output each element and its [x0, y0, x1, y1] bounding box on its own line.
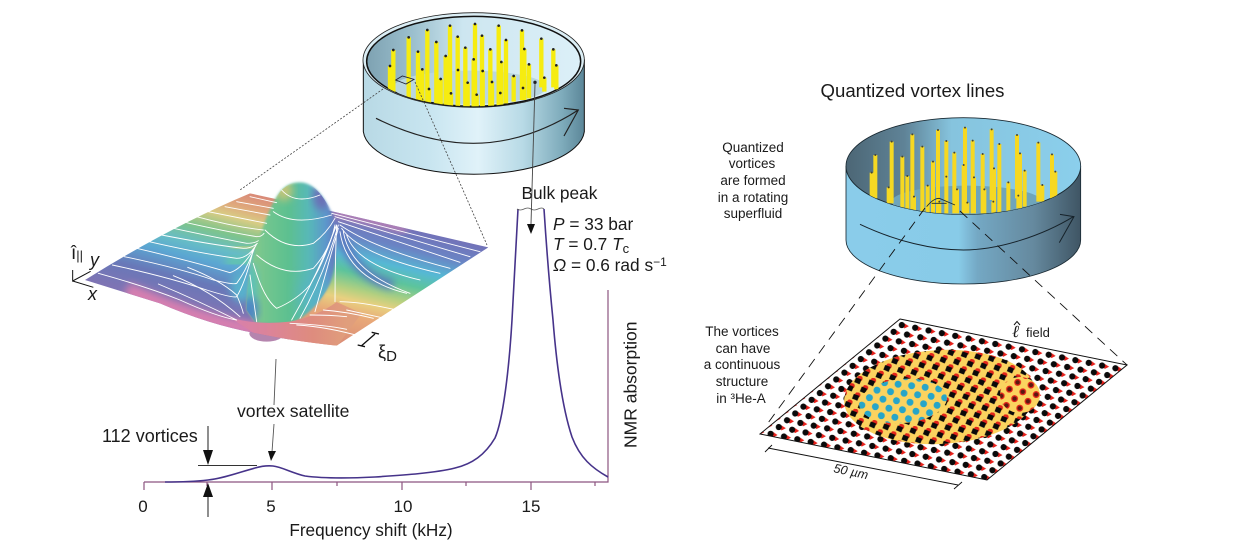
experimental parameters: P = 33 bar [553, 214, 633, 234]
rotation arrow [860, 214, 1074, 250]
tick labels: 0 [138, 497, 148, 516]
left rotating cylinder [363, 13, 584, 174]
small sample square [396, 76, 414, 84]
tick labels: 5 [266, 497, 276, 516]
cylinder outer wall [363, 60, 584, 174]
coherence length scale bar [358, 332, 379, 347]
tick labels [138, 497, 540, 516]
cylinder rim [363, 13, 584, 107]
central peak [242, 181, 336, 324]
coloured surface [80, 187, 493, 350]
experimental parameters: T = 0.7 T [553, 234, 623, 254]
rotation arrow [376, 108, 578, 143]
small sample square [927, 198, 955, 207]
clipped peak top [517, 208, 544, 210]
text: quantized vortices: superfluid [724, 206, 782, 221]
text: continuous structure: The vortices [705, 324, 779, 339]
vortex satellite label and arrow [237, 359, 349, 461]
experimental parameters: c [623, 241, 630, 256]
112 vortices label and arrows: 112 vortices [102, 426, 198, 446]
bulk peak marker dot [533, 81, 537, 84]
vortex satellite label and arrow: vortex satellite [237, 401, 349, 421]
tick labels: 15 [522, 497, 540, 516]
tick labels: 10 [394, 497, 412, 516]
front lip [230, 302, 362, 347]
axis labels: î [71, 243, 76, 264]
3D vortex surface [73, 181, 493, 350]
cyan centre dots [859, 378, 947, 424]
dotted zoom lines: left cylinder to surface [240, 82, 487, 245]
spectrum curve [165, 209, 608, 482]
text: quantized vortices: vortices [729, 156, 776, 171]
bulk peak label and arrow: Bulk peak [522, 183, 598, 203]
xi D label: D [386, 348, 397, 365]
red ring dots [1000, 377, 1040, 413]
text: quantized vortices: Quantized [722, 140, 784, 155]
text: continuous structure: a continuous [704, 357, 781, 372]
experimental parameters: −1 [653, 255, 667, 269]
xi D label: ξ [378, 342, 386, 362]
NMR spectrum chart [138, 208, 640, 540]
text: quantized vortices: are formed [720, 173, 786, 188]
50 micrometre dimension: 50 µm [832, 461, 870, 482]
vortex lines [390, 24, 556, 107]
cylinder interior [367, 16, 581, 106]
text: continuous structure: can have [716, 341, 770, 356]
axis labels: x [87, 284, 98, 304]
underside bump [249, 325, 284, 342]
x axis title: Frequency shift (kHz) [289, 520, 453, 540]
outer dots [760, 319, 1127, 480]
text: continuous structure: structure [716, 374, 768, 389]
l-hat field label [1012, 322, 1050, 341]
lattice panel: l-hat field [760, 319, 1127, 480]
title: Quantized vortex lines: Quantized vortex lines [821, 80, 1004, 101]
interior [846, 118, 1081, 214]
text: quantized vortices: in a rotating [718, 190, 788, 205]
experimental parameters [553, 214, 667, 275]
axis [144, 290, 608, 490]
l-hat field label: field [1026, 325, 1050, 340]
y axis title: NMR absorption [620, 322, 640, 448]
dashed zoom lines: right cylinder to lattice [768, 208, 1127, 423]
bulk peak label and arrow [522, 84, 598, 234]
axes [73, 270, 93, 287]
112 vortices label and arrows [102, 426, 257, 517]
axis labels: || [76, 248, 83, 263]
l-hat field label: ℓ [1012, 322, 1019, 341]
text: continuous structure: in ³He-A [716, 391, 766, 406]
right rotating cylinder [846, 118, 1081, 284]
axis labels [70, 243, 100, 304]
50 micrometre dimension [765, 445, 962, 489]
axis labels: y [88, 250, 100, 270]
experimental parameters: Ω = 0.6 rad s [553, 255, 653, 275]
vortex lines [872, 128, 1055, 218]
wall [846, 166, 1081, 284]
white field lines [98, 190, 480, 337]
yellow texture region [844, 350, 1033, 444]
